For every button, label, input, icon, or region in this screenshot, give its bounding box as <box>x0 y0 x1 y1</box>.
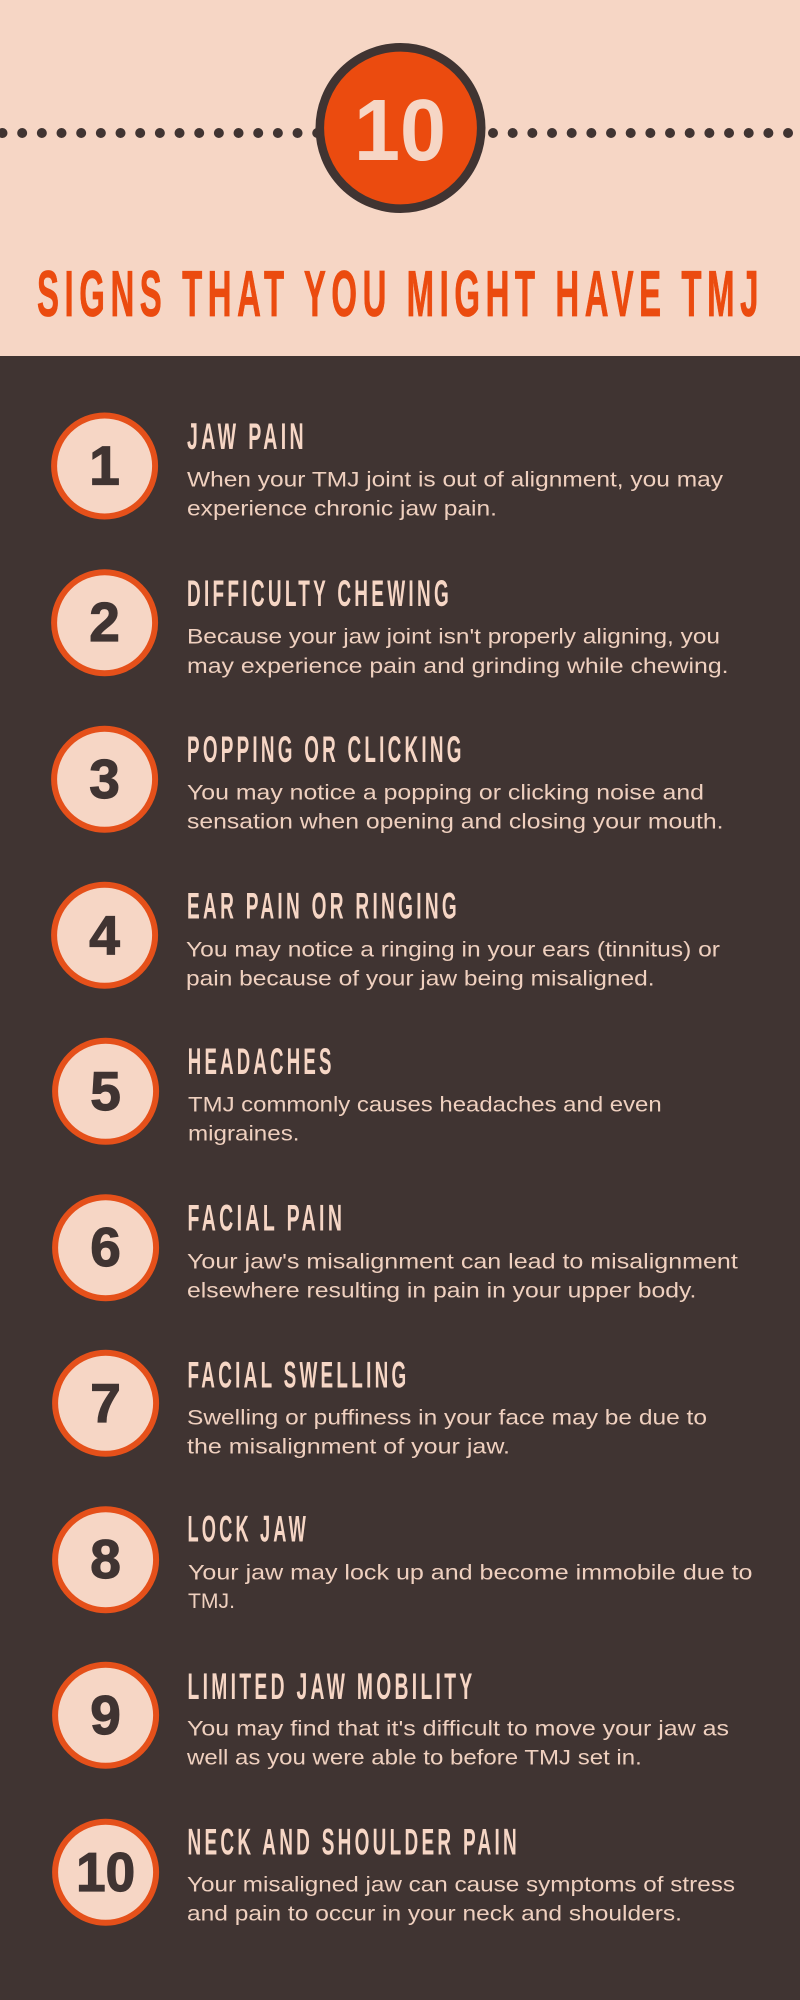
description 5 <box>188 1093 662 1146</box>
description 10: and pain to occur in your neck and shoulders. <box>187 1903 682 1926</box>
number badge 9 <box>55 1665 156 1766</box>
number badge 10 <box>55 1822 156 1923</box>
sign 1 <box>54 415 724 521</box>
number badge 7 <box>55 1353 156 1454</box>
sign 8: LOCK JAW <box>188 1507 309 1549</box>
description 2 <box>187 626 729 678</box>
number badge 4 <box>54 885 155 986</box>
heading 7: FACIAL SWELLING <box>188 1353 410 1395</box>
description 4: pain because of your jaw being misaligned. <box>186 968 655 991</box>
description 4 <box>186 939 720 991</box>
description 4: You may notice a ringing in your ears (tinnitus) or <box>186 939 720 962</box>
number badge 6: 6 <box>90 1216 121 1278</box>
description 2: may experience pain and grinding while chewing. <box>187 655 729 678</box>
description 2: Because your jaw joint isn't properly aligning, you <box>187 626 720 649</box>
number badge 1: 1 <box>89 434 120 496</box>
sign 5: HEADACHES <box>188 1040 335 1082</box>
description 3: sensation when opening and closing your mouth. <box>187 810 724 833</box>
description 10 <box>187 1874 735 1926</box>
heading 9: LIMITED JAW MOBILITY <box>188 1665 476 1707</box>
number badge 9: 9 <box>90 1684 121 1746</box>
number badge 7: 7 <box>90 1372 121 1434</box>
heading 3: POPPING OR CLICKING <box>187 728 465 770</box>
description 6 <box>187 1250 738 1302</box>
number badge 8: 8 <box>90 1528 121 1590</box>
heading 4: EAR PAIN OR RINGING <box>187 885 460 927</box>
number badge 3: 3 <box>89 748 120 810</box>
sign 3 <box>54 728 724 833</box>
sign 2 <box>54 572 729 678</box>
dotted line: left <box>2 128 318 138</box>
sign 8 <box>55 1507 753 1613</box>
number badge 4: 4 <box>89 904 120 966</box>
sign 10 <box>55 1821 735 1926</box>
description 1: When your TMJ joint is out of alignment, you may <box>187 469 724 492</box>
number badge 1 <box>54 416 155 516</box>
description 6: elsewhere resulting in pain in your upper body. <box>187 1279 696 1302</box>
description 7 <box>187 1406 707 1459</box>
description 3: You may notice a popping or clicking noise and <box>187 781 704 804</box>
sign 5 <box>55 1040 662 1146</box>
number badge 3 <box>54 729 155 830</box>
description 7: the misalignment of your jaw. <box>187 1436 510 1459</box>
number badge 2: 2 <box>89 591 120 653</box>
description 5: TMJ commonly causes headaches and even <box>188 1093 662 1116</box>
panel: header <box>0 0 800 356</box>
number badge 5: 5 <box>90 1060 121 1122</box>
description 1 <box>187 469 724 521</box>
heading 6: FACIAL PAIN <box>188 1197 345 1239</box>
heading 2: DIFFICULTY CHEWING <box>187 572 452 614</box>
sign 6 <box>55 1197 738 1302</box>
description 1: experience chronic jaw pain. <box>187 498 497 521</box>
description 5: migraines. <box>188 1123 300 1146</box>
description 10: Your misaligned jaw can cause symptoms of stress <box>187 1874 735 1897</box>
description 8: TMJ. <box>188 1590 235 1613</box>
sign 4 <box>54 885 720 991</box>
description 8: Your jaw may lock up and become immobile due to <box>188 1561 752 1584</box>
number badge 2 <box>54 572 155 673</box>
sign 7 <box>55 1353 707 1459</box>
description 9: You may find that it's difficult to move your jaw as <box>187 1718 729 1741</box>
number badge 10: 10 <box>76 1841 135 1903</box>
dotted line: right <box>493 128 792 138</box>
number badge 5 <box>55 1041 156 1142</box>
description 7: Swelling or puffiness in your face may be due to <box>187 1406 707 1429</box>
description 9 <box>186 1718 729 1769</box>
description 8 <box>188 1561 752 1613</box>
description 6: Your jaw's misalignment can lead to misalignment <box>187 1250 738 1273</box>
badge: number 10: 10 <box>354 82 446 179</box>
heading 1: JAW PAIN <box>187 415 307 457</box>
number badge 6 <box>55 1197 156 1298</box>
description 3 <box>187 781 724 833</box>
sign 9 <box>55 1665 729 1769</box>
badge: number 10 <box>320 47 481 209</box>
description 9: well as you were able to before TMJ set in. <box>186 1746 642 1769</box>
number badge 8 <box>55 1509 156 1610</box>
